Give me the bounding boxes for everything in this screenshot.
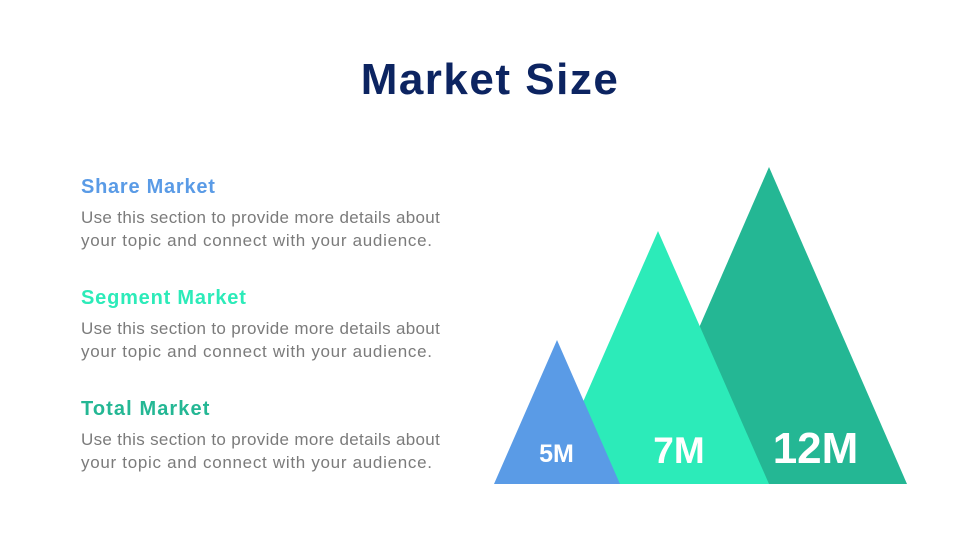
text block: Total Market description <box>81 430 440 472</box>
triangle: segment market 7M <box>547 231 769 484</box>
text block: Total Market description: your topic and connect with your audience. <box>81 453 433 472</box>
heading: Segment Market: Segment Market <box>81 287 247 309</box>
text block: Segment Market description: your topic and connect with your audience. <box>81 342 433 361</box>
text block: Segment Market description <box>81 319 440 361</box>
heading: Share Market: Share Market <box>81 176 216 198</box>
text block: Share Market description: Use this section to provide more details about <box>81 208 440 227</box>
triangle: total market 12M <box>631 167 907 484</box>
text block: Total Market description: Use this section to provide more details about <box>81 430 440 449</box>
triangle: total market 12M: 12M <box>773 424 858 473</box>
heading: Total Market: Total Market <box>81 398 211 420</box>
text block: Share Market description: your topic and connect with your audience. <box>81 231 433 250</box>
title: Market Size <box>361 55 619 104</box>
triangle: share market 5M <box>494 340 620 484</box>
triangle: segment market 7M: 7M <box>653 430 705 471</box>
text block: Segment Market description: Use this section to provide more details about <box>81 319 440 338</box>
text block: Share Market description <box>81 208 440 250</box>
triangle: share market 5M: 5M <box>539 440 574 468</box>
